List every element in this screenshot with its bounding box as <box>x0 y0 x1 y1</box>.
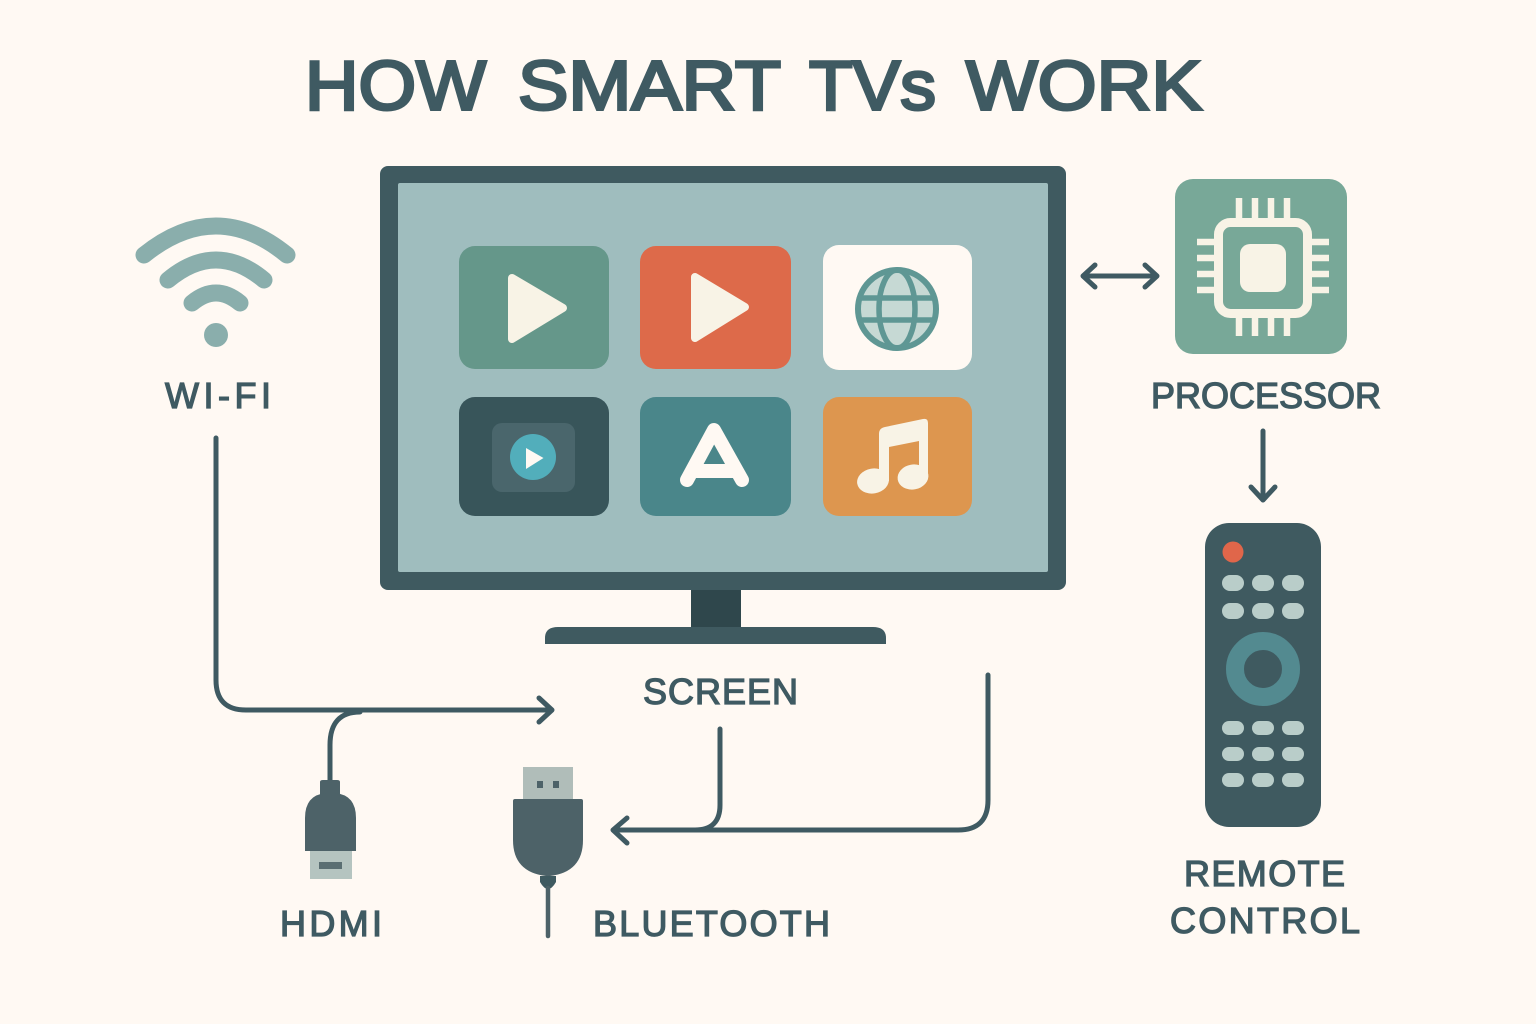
arrow: tv to bluetooth <box>613 675 988 843</box>
label: hdmi: HDMI <box>280 903 382 944</box>
icon: processor <box>1175 179 1347 354</box>
app tile: red play <box>640 246 791 369</box>
title: TVs <box>809 46 936 124</box>
cable: hdmi <box>330 712 360 782</box>
label: screen: SCREEN <box>643 671 798 712</box>
TV stand neck <box>691 588 741 629</box>
label: bluetooth: BLUETOOTH <box>593 903 830 944</box>
icon: bluetooth plug <box>513 767 583 936</box>
icon: wi-fi <box>144 226 287 347</box>
label: processor: PROCESSOR <box>1151 375 1381 416</box>
title: HOW <box>305 46 486 124</box>
app tile: music <box>823 397 972 516</box>
title <box>305 46 1202 124</box>
icon: television <box>380 166 1066 644</box>
label: remote control: REMOTE <box>1184 853 1345 894</box>
app tile: globe browser <box>823 245 972 370</box>
TV screen <box>398 183 1048 572</box>
app tile: video player <box>459 397 609 516</box>
label: remote control: CONTROL <box>1170 900 1360 941</box>
title: WORK <box>966 46 1202 124</box>
app tile: green play <box>459 246 609 369</box>
TV stand base <box>545 627 886 644</box>
label: wi-fi: WI-FI <box>165 375 271 416</box>
app tile: letter A <box>640 397 791 516</box>
icon: remote control <box>1205 523 1321 827</box>
title: SMART <box>518 46 781 124</box>
arrow: processor to remote <box>1251 431 1275 500</box>
arrow: tv to processor <box>1083 265 1157 287</box>
arrow: screen to bluetooth <box>695 729 720 830</box>
icon: hdmi plug <box>305 780 356 879</box>
label: remote control <box>1170 853 1360 941</box>
arrow: wi-fi to screen <box>216 438 552 722</box>
TV bezel <box>380 166 1066 590</box>
